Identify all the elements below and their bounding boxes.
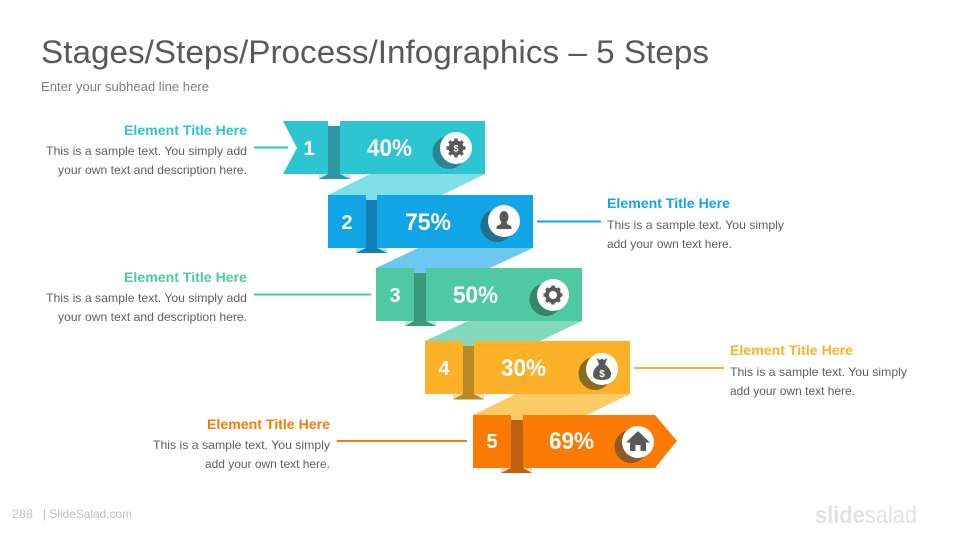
- step 2 number: 2: [341, 212, 353, 234]
- callout 5: add your own text here.: [205, 457, 330, 471]
- callout 2: This is a sample text. You simply: [607, 218, 784, 232]
- step 2 percent: 75%: [405, 209, 451, 236]
- callout 2: add your own text here.: [607, 237, 732, 251]
- step 3 percent: 50%: [453, 282, 498, 309]
- step 3 number: 3: [389, 285, 401, 307]
- callout 1: Element Title Here: [124, 122, 247, 138]
- callout 2: [537, 195, 784, 251]
- footer site name: | SlideSalad.com: [43, 507, 132, 521]
- callout 5: [153, 416, 467, 471]
- step 5 banner: [473, 415, 677, 473]
- step 3 banner: [376, 268, 582, 326]
- step 1 number: 1: [303, 138, 315, 160]
- callout 1: [46, 122, 288, 177]
- connector band 2 to 3: [376, 248, 533, 268]
- callout 1: your own text and description here.: [58, 163, 247, 177]
- callout 3: your own text and description here.: [58, 310, 247, 324]
- callout 3: Element Title Here: [124, 269, 247, 285]
- callout 4: This is a sample text. You simply: [730, 365, 907, 379]
- callout 3: [46, 269, 371, 324]
- icon: dollar gear: $: [453, 144, 459, 154]
- connector band 3 to 4: [425, 321, 582, 341]
- icon: money bag: $: [599, 369, 605, 380]
- icon: dollar gear: [432, 132, 472, 169]
- title: Stages/Steps/Process/Infographics – 5 Steps: [41, 34, 709, 70]
- callout 4: add your own text here.: [730, 384, 855, 398]
- icon: gear: [530, 279, 569, 316]
- step 5 percent: 69%: [549, 428, 594, 455]
- step 2 banner: [328, 195, 533, 253]
- icon: user: [480, 205, 520, 242]
- callout 1: This is a sample text. You simply add: [46, 144, 247, 158]
- footer page number: 288: [12, 507, 33, 521]
- step 1 banner: [283, 121, 485, 179]
- callout 4: Element Title Here: [730, 342, 853, 358]
- callout 2: Element Title Here: [607, 195, 730, 211]
- step 4 number: 4: [438, 358, 450, 380]
- callout 3: This is a sample text. You simply add: [46, 291, 247, 305]
- step 5 number: 5: [486, 431, 498, 453]
- connector band 4 to 5: [473, 394, 630, 415]
- subhead: Enter your subhead line here: [41, 79, 209, 94]
- connector band 1 to 2: [328, 174, 485, 195]
- footer logo: slidesalad: [815, 502, 917, 529]
- callout 4: [634, 342, 907, 398]
- icon: house: [614, 426, 654, 463]
- callout 5: Element Title Here: [207, 416, 330, 432]
- step 1 percent: 40%: [367, 135, 412, 162]
- callout 5: This is a sample text. You simply: [153, 438, 330, 452]
- icon: money bag: [578, 353, 618, 390]
- step 4 percent: 30%: [501, 355, 546, 382]
- step 4 banner: [425, 341, 630, 400]
